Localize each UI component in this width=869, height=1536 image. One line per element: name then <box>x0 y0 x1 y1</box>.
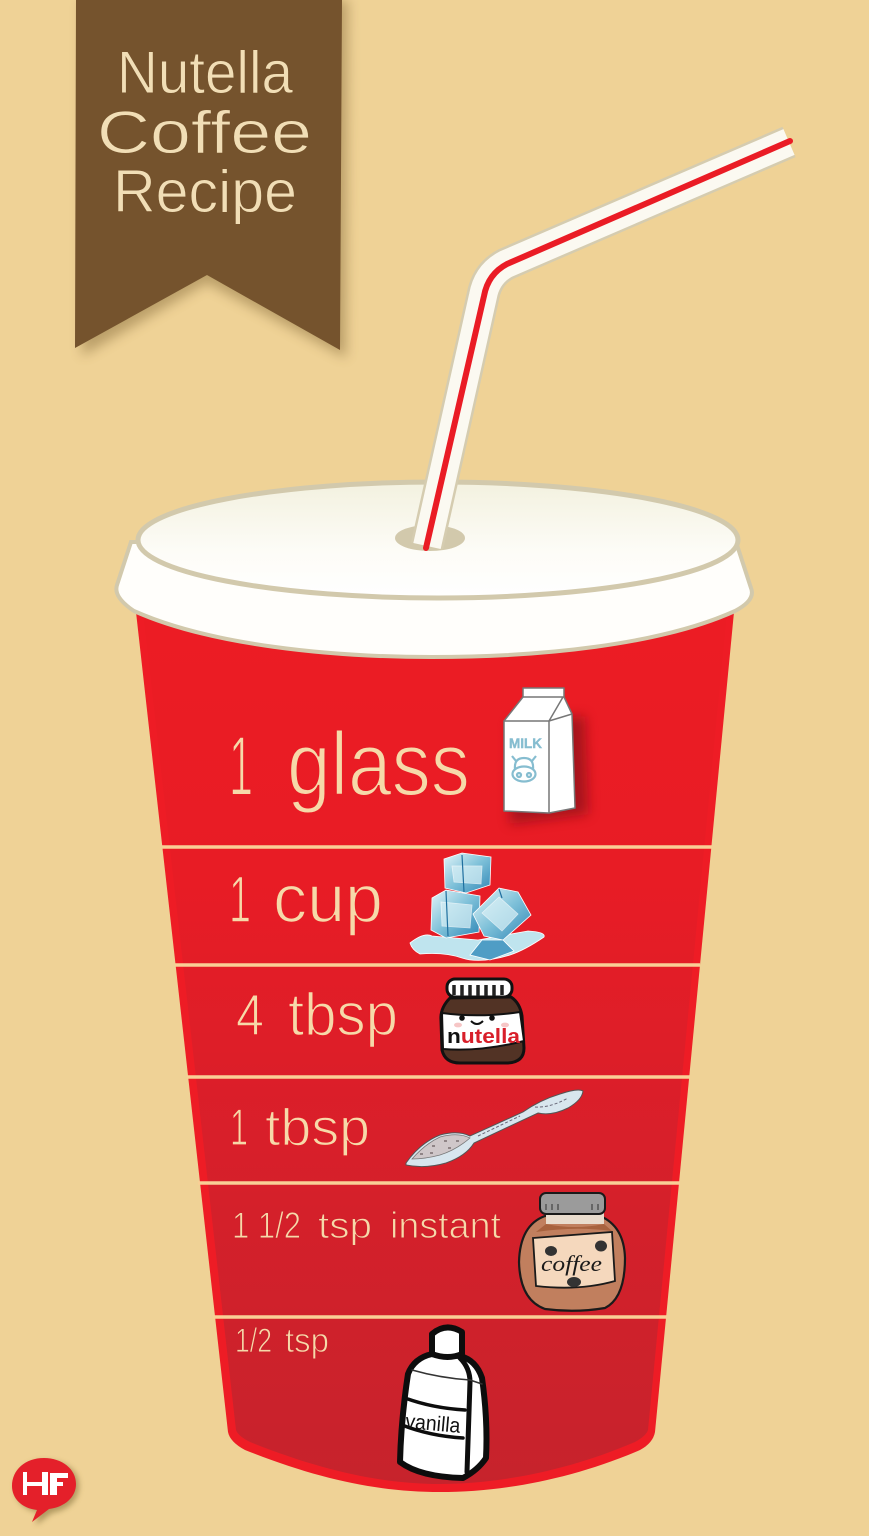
icon: nutella jar <box>441 979 524 1063</box>
title text: Nutella <box>117 39 294 106</box>
ingredient: 1 tbsp: 1 <box>230 1099 248 1157</box>
title text: Coffee <box>97 99 312 166</box>
icon: coffee jar: coffee <box>541 1251 602 1276</box>
cup body <box>136 612 734 1492</box>
ingredient: 1 1/2 tsp instant <box>232 1205 502 1246</box>
icon: milk carton: MILK <box>509 735 542 751</box>
ingredient: 1 1/2 tsp instant: 1 1/2 <box>232 1205 301 1246</box>
icon: ice cubes <box>410 853 544 960</box>
icon: sugar spoon <box>406 1090 583 1167</box>
ingredient: 1/2 tsp: 1/2 <box>235 1322 272 1360</box>
icon: cow face <box>512 756 536 782</box>
ingredient: 4 tbsp <box>236 981 398 1048</box>
ingredient: 1 glass: 1 <box>229 719 253 813</box>
ingredient: 1 glass: glass <box>287 715 470 815</box>
cup lid <box>116 482 752 657</box>
title banner <box>75 0 348 358</box>
icon: vanilla bottle <box>400 1327 486 1478</box>
section dividers <box>162 847 712 1317</box>
ingredient: 1 1/2 tsp instant: tsp <box>318 1205 372 1246</box>
icon: nutella jar: nutella <box>447 1026 521 1048</box>
ingredient: 1 cup: 1 <box>229 862 251 936</box>
ingredient: 1 glass <box>229 715 470 815</box>
ingredient: 1 tbsp: tbsp <box>265 1099 370 1157</box>
icon: vanilla bottle: vanilla <box>405 1410 462 1438</box>
logo: HF speech bubble <box>12 1458 79 1525</box>
ingredient: 1 1/2 tsp instant: instant <box>390 1205 502 1246</box>
title text: Recipe <box>113 158 297 225</box>
ingredient: 4 tbsp: tbsp <box>288 981 398 1048</box>
ingredient: 4 tbsp: 4 <box>236 983 264 1048</box>
ingredient: 1/2 tsp <box>235 1322 329 1360</box>
icon: coffee jar <box>519 1193 625 1311</box>
straw <box>426 141 790 548</box>
title text <box>97 39 312 225</box>
ingredient: 1 cup: cup <box>273 861 383 937</box>
icon: milk carton <box>504 688 588 824</box>
ingredient: 1/2 tsp: tsp <box>285 1322 329 1360</box>
